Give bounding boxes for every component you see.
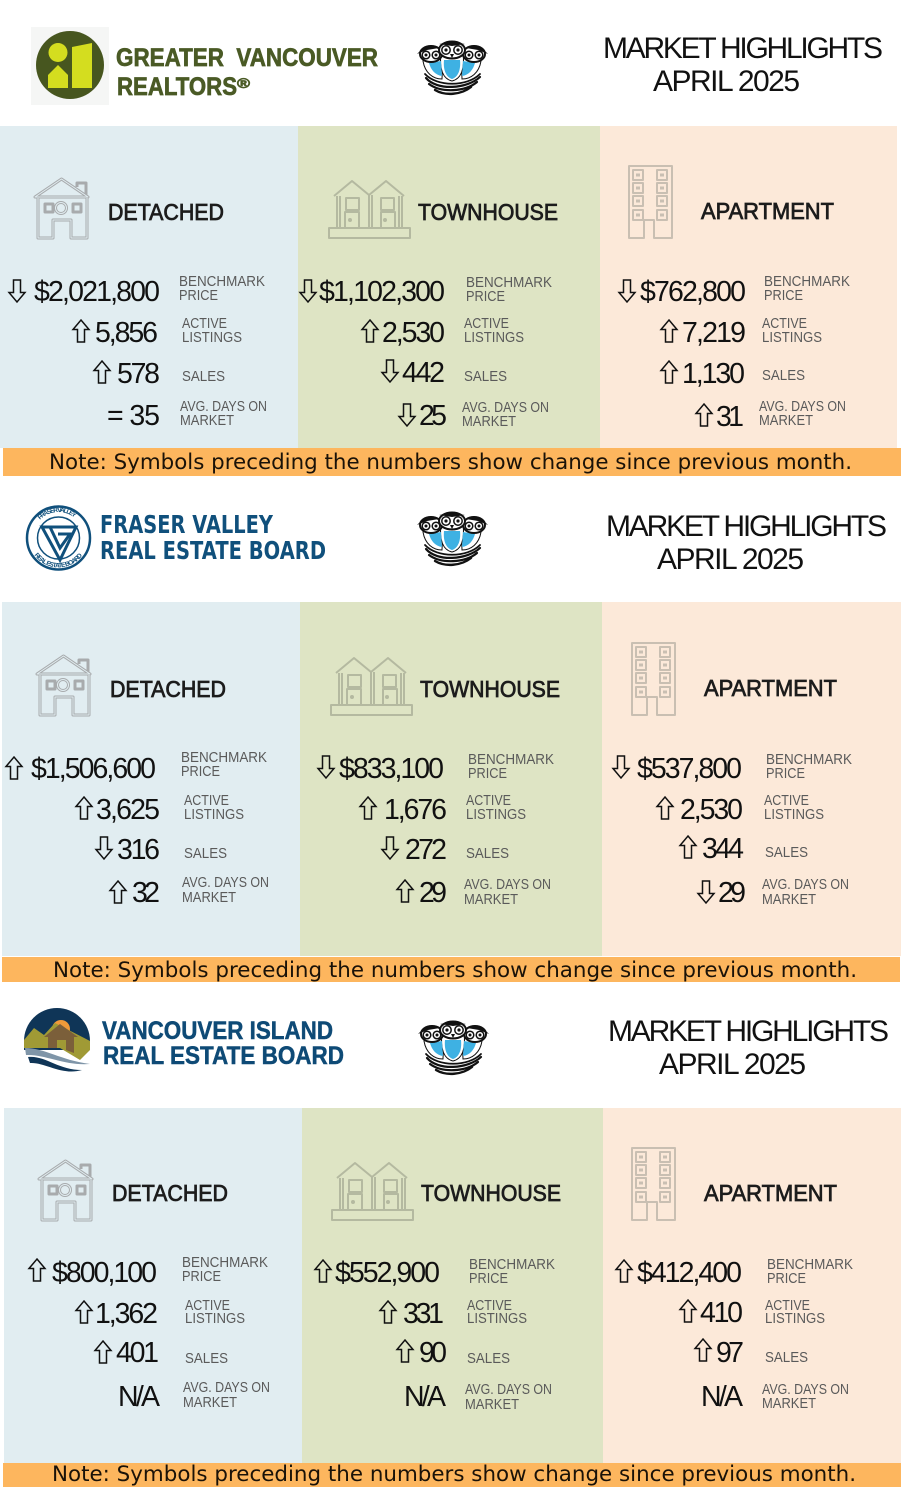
stat: average days on market: N/A <box>404 1381 446 1413</box>
brand name: Greater Vancouver Realtors: GREATER VANCOUVER <box>116 44 378 72</box>
stat: benchmark price: PRICE <box>764 288 803 304</box>
stat: average days on market: MARKET <box>462 414 516 430</box>
heading: apartment: APARTMENT <box>701 198 834 224</box>
title: market highlights <box>608 1015 889 1081</box>
panel: townhouse <box>302 1108 603 1463</box>
stat: sales: SALES <box>182 369 225 385</box>
stat: benchmark price: PRICE <box>179 288 218 304</box>
stat: active listings: 7,219 <box>682 317 746 349</box>
panel: townhouse <box>298 126 600 448</box>
stat: average days on market: AVG. DAYS ON <box>183 1380 270 1396</box>
stat: average days on market <box>118 1380 270 1413</box>
stat: benchmark price: PRICE <box>182 1269 221 1285</box>
stat: average days on market: N/A <box>701 1381 743 1413</box>
stat: active listings: 410 <box>700 1297 743 1329</box>
title: market highlights: MARKET HIGHLIGHTS <box>606 510 887 543</box>
stat: sales <box>96 834 227 866</box>
brand name: Fraser Valley Real Estate Board: REAL ESTATE BOARD <box>100 536 326 565</box>
title: market highlights: APRIL 2025 <box>653 65 800 98</box>
stat: sales: 316 <box>117 834 160 866</box>
stat: active listings: 2,530 <box>680 794 743 826</box>
stat: benchmark price <box>9 274 265 308</box>
stat: average days on market <box>404 1381 552 1413</box>
stat: active listings: LISTINGS <box>765 1311 825 1327</box>
stat: benchmark price: $552,900 <box>335 1257 440 1289</box>
stat: active listings: ACTIVE <box>467 1298 512 1314</box>
stat: sales: 97 <box>716 1337 744 1369</box>
heading: townhouse: TOWNHOUSE <box>418 199 558 225</box>
header: Vancouver Island <box>24 1008 889 1081</box>
stat: average days on market: AVG. DAYS ON <box>762 877 849 893</box>
stat: active listings: LISTINGS <box>762 330 822 346</box>
icon: apartment building <box>629 166 672 238</box>
stat: active listings <box>380 1298 527 1330</box>
stat: average days on market <box>696 399 846 433</box>
icon: house <box>37 656 90 715</box>
stat: active listings <box>360 793 526 826</box>
stat: benchmark price: BENCHMARK <box>469 1257 555 1273</box>
stat: sales <box>661 358 805 390</box>
stat: benchmark price: $762,800 <box>640 276 746 308</box>
icon: townhouses <box>331 658 412 715</box>
stat: benchmark price: BENCHMARK <box>766 752 852 768</box>
stat: active listings: 2,530 <box>382 317 445 349</box>
stat: sales: 344 <box>702 833 744 865</box>
stat: active listings: ACTIVE <box>184 793 229 809</box>
stat: active listings: ACTIVE <box>464 316 509 332</box>
title: market highlights: MARKET HIGHLIGHTS <box>603 32 883 65</box>
stat: active listings: LISTINGS <box>466 807 526 823</box>
stat: benchmark price <box>616 1257 853 1289</box>
stat: active listings: LISTINGS <box>764 807 824 823</box>
brand name: Greater Vancouver Realtors: REALTORS <box>117 73 237 101</box>
stat: benchmark price: $833,100 <box>339 753 444 785</box>
stat: benchmark price: PRICE <box>468 766 507 782</box>
stat: sales: SALES <box>765 1350 808 1366</box>
stat: average days on market: MARKET <box>759 413 813 429</box>
heading: detached: DETACHED <box>112 1180 228 1206</box>
stat: sales: SALES <box>467 1351 510 1367</box>
stat: average days on market: 25 <box>419 400 447 432</box>
stat: benchmark price: PRICE <box>767 1271 806 1287</box>
stat: benchmark price: BENCHMARK <box>468 752 554 768</box>
title: market highlights: MARKET HIGHLIGHTS <box>608 1015 889 1048</box>
stat: active listings: LISTINGS <box>185 1311 245 1327</box>
heading: apartment: APARTMENT <box>704 1180 837 1206</box>
stat: sales: SALES <box>464 369 507 385</box>
stat: sales: 90 <box>419 1337 447 1369</box>
stat: sales: SALES <box>466 846 509 862</box>
stat: active listings: 331 <box>403 1298 444 1330</box>
heading: townhouse: TOWNHOUSE <box>421 1180 561 1206</box>
stat: benchmark price <box>315 1257 555 1289</box>
stat: active listings: ACTIVE <box>764 793 809 809</box>
stat: average days on market: AVG. DAYS ON <box>462 400 549 416</box>
stat: average days on market: 29 <box>419 877 447 909</box>
stat: active listings: ACTIVE <box>765 1298 810 1314</box>
stat: sales: 272 <box>405 834 447 866</box>
stat: benchmark price <box>300 275 552 308</box>
stat: benchmark price: PRICE <box>469 1271 508 1287</box>
stat: benchmark price: $412,400 <box>637 1257 742 1289</box>
stat: active listings: ACTIVE <box>466 793 511 809</box>
heading: detached: DETACHED <box>110 676 226 702</box>
stat: sales <box>680 833 808 865</box>
stat: benchmark price: BENCHMARK <box>767 1257 853 1273</box>
brand name: Greater Vancouver Realtors: ® <box>237 75 251 91</box>
stat: sales <box>94 358 225 390</box>
stat: average days on market: MARKET <box>762 892 816 908</box>
stat: active listings: LISTINGS <box>464 330 524 346</box>
stat: benchmark price: $800,100 <box>52 1257 157 1289</box>
stat: active listings <box>657 793 824 826</box>
panel: apartment <box>600 126 897 448</box>
icon: owl nest <box>417 42 488 94</box>
stat: average days on market <box>399 400 549 432</box>
stat: active listings: 3,625 <box>96 794 160 826</box>
stat: active listings: 5,856 <box>95 317 158 349</box>
stat: active listings: 1,362 <box>95 1298 158 1330</box>
stat: sales: 578 <box>117 358 160 390</box>
brand name: Fraser Valley Real Estate Board <box>100 510 326 565</box>
stat: sales: 1,130 <box>682 358 745 390</box>
stat: sales: 401 <box>116 1337 159 1369</box>
stat: average days on market: AVG. DAYS ON <box>180 399 267 415</box>
logo: Fraser Valley emblem <box>26 505 92 571</box>
stat: average days on market: MARKET <box>183 1395 237 1411</box>
stat: average days on market <box>107 399 267 432</box>
panel: apartment <box>603 1108 901 1463</box>
stat: average days on market: 32 <box>132 877 160 909</box>
logo: Fraser Valley emblem: REAL ESTATE BOARD <box>34 552 82 568</box>
brand name: Vancouver Island Real Estate Board <box>102 1017 344 1070</box>
stat: average days on market: AVG. DAYS ON <box>465 1382 552 1398</box>
stat: benchmark price <box>29 1255 268 1289</box>
stat: benchmark price: BENCHMARK <box>466 275 552 291</box>
logo: Greater Vancouver Realtors emblem <box>31 27 109 105</box>
stat: average days on market: MARKET <box>464 892 518 908</box>
brand name: Fraser Valley Real Estate Board: FRASER VALLEY <box>100 510 274 539</box>
stat: active listings: ACTIVE <box>182 316 227 332</box>
panel: detached <box>2 602 300 956</box>
icon: apartment building <box>632 1148 675 1220</box>
brand name: Vancouver Island Real Estate Board: VANCOUVER ISLAND <box>102 1017 333 1045</box>
stat: average days on market: MARKET <box>465 1397 519 1413</box>
icon: house <box>35 179 88 238</box>
stat: sales: SALES <box>762 368 805 384</box>
stat: average days on market: = 35 <box>107 400 160 432</box>
stat: average days on market <box>698 877 849 909</box>
note bar: Note: Symbols preceding the numbers show change since previous month. <box>53 958 857 982</box>
stat: benchmark price: PRICE <box>766 766 805 782</box>
header: Fraser Valley <box>26 505 887 576</box>
stat: active listings: 1,676 <box>384 794 447 826</box>
stat: benchmark price: $1,506,600 <box>31 753 156 785</box>
stat: active listings <box>362 316 524 349</box>
icon: townhouses <box>329 181 410 238</box>
stat: sales <box>95 1337 228 1369</box>
section: Vancouver Island Real Estate Board <box>3 1008 901 1487</box>
stat: benchmark price: PRICE <box>181 764 220 780</box>
stat: sales <box>382 357 507 389</box>
title: market highlights: APRIL 2025 <box>659 1048 806 1081</box>
title: market highlights <box>606 510 887 576</box>
stat: average days on market: MARKET <box>180 413 234 429</box>
title: market highlights <box>603 32 883 98</box>
stat: active listings: LISTINGS <box>182 330 242 346</box>
note bar: Note: Symbols preceding the numbers show change since previous month. <box>52 1462 856 1486</box>
stat: active listings <box>661 316 822 349</box>
stat: sales <box>695 1337 808 1369</box>
stat: benchmark price: $537,800 <box>637 753 742 785</box>
stat: active listings: ACTIVE <box>762 316 807 332</box>
stat: benchmark price <box>318 752 554 785</box>
panel: apartment <box>602 602 901 956</box>
stat: average days on market: 29 <box>718 877 746 909</box>
stat: sales <box>397 1337 510 1369</box>
heading: detached: DETACHED <box>108 199 224 225</box>
stat: benchmark price: BENCHMARK <box>764 274 850 290</box>
stat: active listings <box>73 316 242 349</box>
stat: active listings <box>680 1297 825 1329</box>
stat: benchmark price: $2,021,800 <box>34 276 160 308</box>
heading: apartment: APARTMENT <box>704 675 837 701</box>
brand name: Vancouver Island Real Estate Board: REAL ESTATE BOARD <box>103 1042 344 1070</box>
stat: benchmark price: BENCHMARK <box>181 750 267 766</box>
icon: apartment building <box>632 643 675 715</box>
icon: house <box>39 1161 92 1220</box>
stat: benchmark price <box>613 752 852 785</box>
logo: Fraser Valley emblem: FRASER VALLEY <box>38 508 77 520</box>
stat: average days on market <box>110 875 269 909</box>
stat: active listings: LISTINGS <box>467 1311 527 1327</box>
stat: average days on market: AVG. DAYS ON <box>464 877 551 893</box>
stat: average days on market: 31 <box>716 401 744 433</box>
stat: average days on market: AVG. DAYS ON <box>759 399 846 415</box>
stat: average days on market: MARKET <box>182 890 236 906</box>
stat: active listings <box>76 1298 245 1330</box>
heading: townhouse: TOWNHOUSE <box>420 676 560 702</box>
section: Fraser Valley Real Estate Board <box>2 505 901 982</box>
header: Greater Vancouver <box>31 27 883 105</box>
panel: townhouse <box>300 602 602 956</box>
stat: sales: SALES <box>184 846 227 862</box>
stat: average days on market: N/A <box>118 1381 160 1413</box>
panel: detached <box>0 126 298 448</box>
stat: average days on market <box>397 877 551 909</box>
icon: owl nest <box>417 512 488 565</box>
note bar: Note: Symbols preceding the numbers show change since previous month. <box>49 450 852 474</box>
icon: townhouses <box>332 1163 413 1220</box>
stat: benchmark price: BENCHMARK <box>182 1255 268 1271</box>
stat: benchmark price: $1,102,300 <box>319 276 445 308</box>
stat: average days on market <box>701 1381 849 1413</box>
stat: sales: 442 <box>402 357 445 389</box>
stat: active listings <box>76 793 244 826</box>
stat: sales: SALES <box>185 1351 228 1367</box>
stat: benchmark price <box>6 750 267 785</box>
title: market highlights: APRIL 2025 <box>657 543 804 576</box>
stat: sales: SALES <box>765 845 808 861</box>
stat: active listings: ACTIVE <box>185 1298 230 1314</box>
stat: sales <box>382 834 509 866</box>
stat: active listings: LISTINGS <box>184 807 244 823</box>
logo: Vancouver Island emblem <box>24 1008 90 1072</box>
stat: benchmark price: BENCHMARK <box>179 274 265 290</box>
stat: benchmark price: PRICE <box>466 289 505 305</box>
stat: average days on market: AVG. DAYS ON <box>182 875 269 891</box>
panel: detached <box>4 1108 302 1463</box>
stat: benchmark price <box>619 274 850 308</box>
stat: average days on market: AVG. DAYS ON <box>762 1382 849 1398</box>
brand name: Greater Vancouver Realtors <box>116 44 378 101</box>
stat: average days on market: MARKET <box>762 1396 816 1412</box>
icon: owl nest <box>418 1022 489 1074</box>
section: Greater Vancouver Realtors <box>0 27 901 476</box>
